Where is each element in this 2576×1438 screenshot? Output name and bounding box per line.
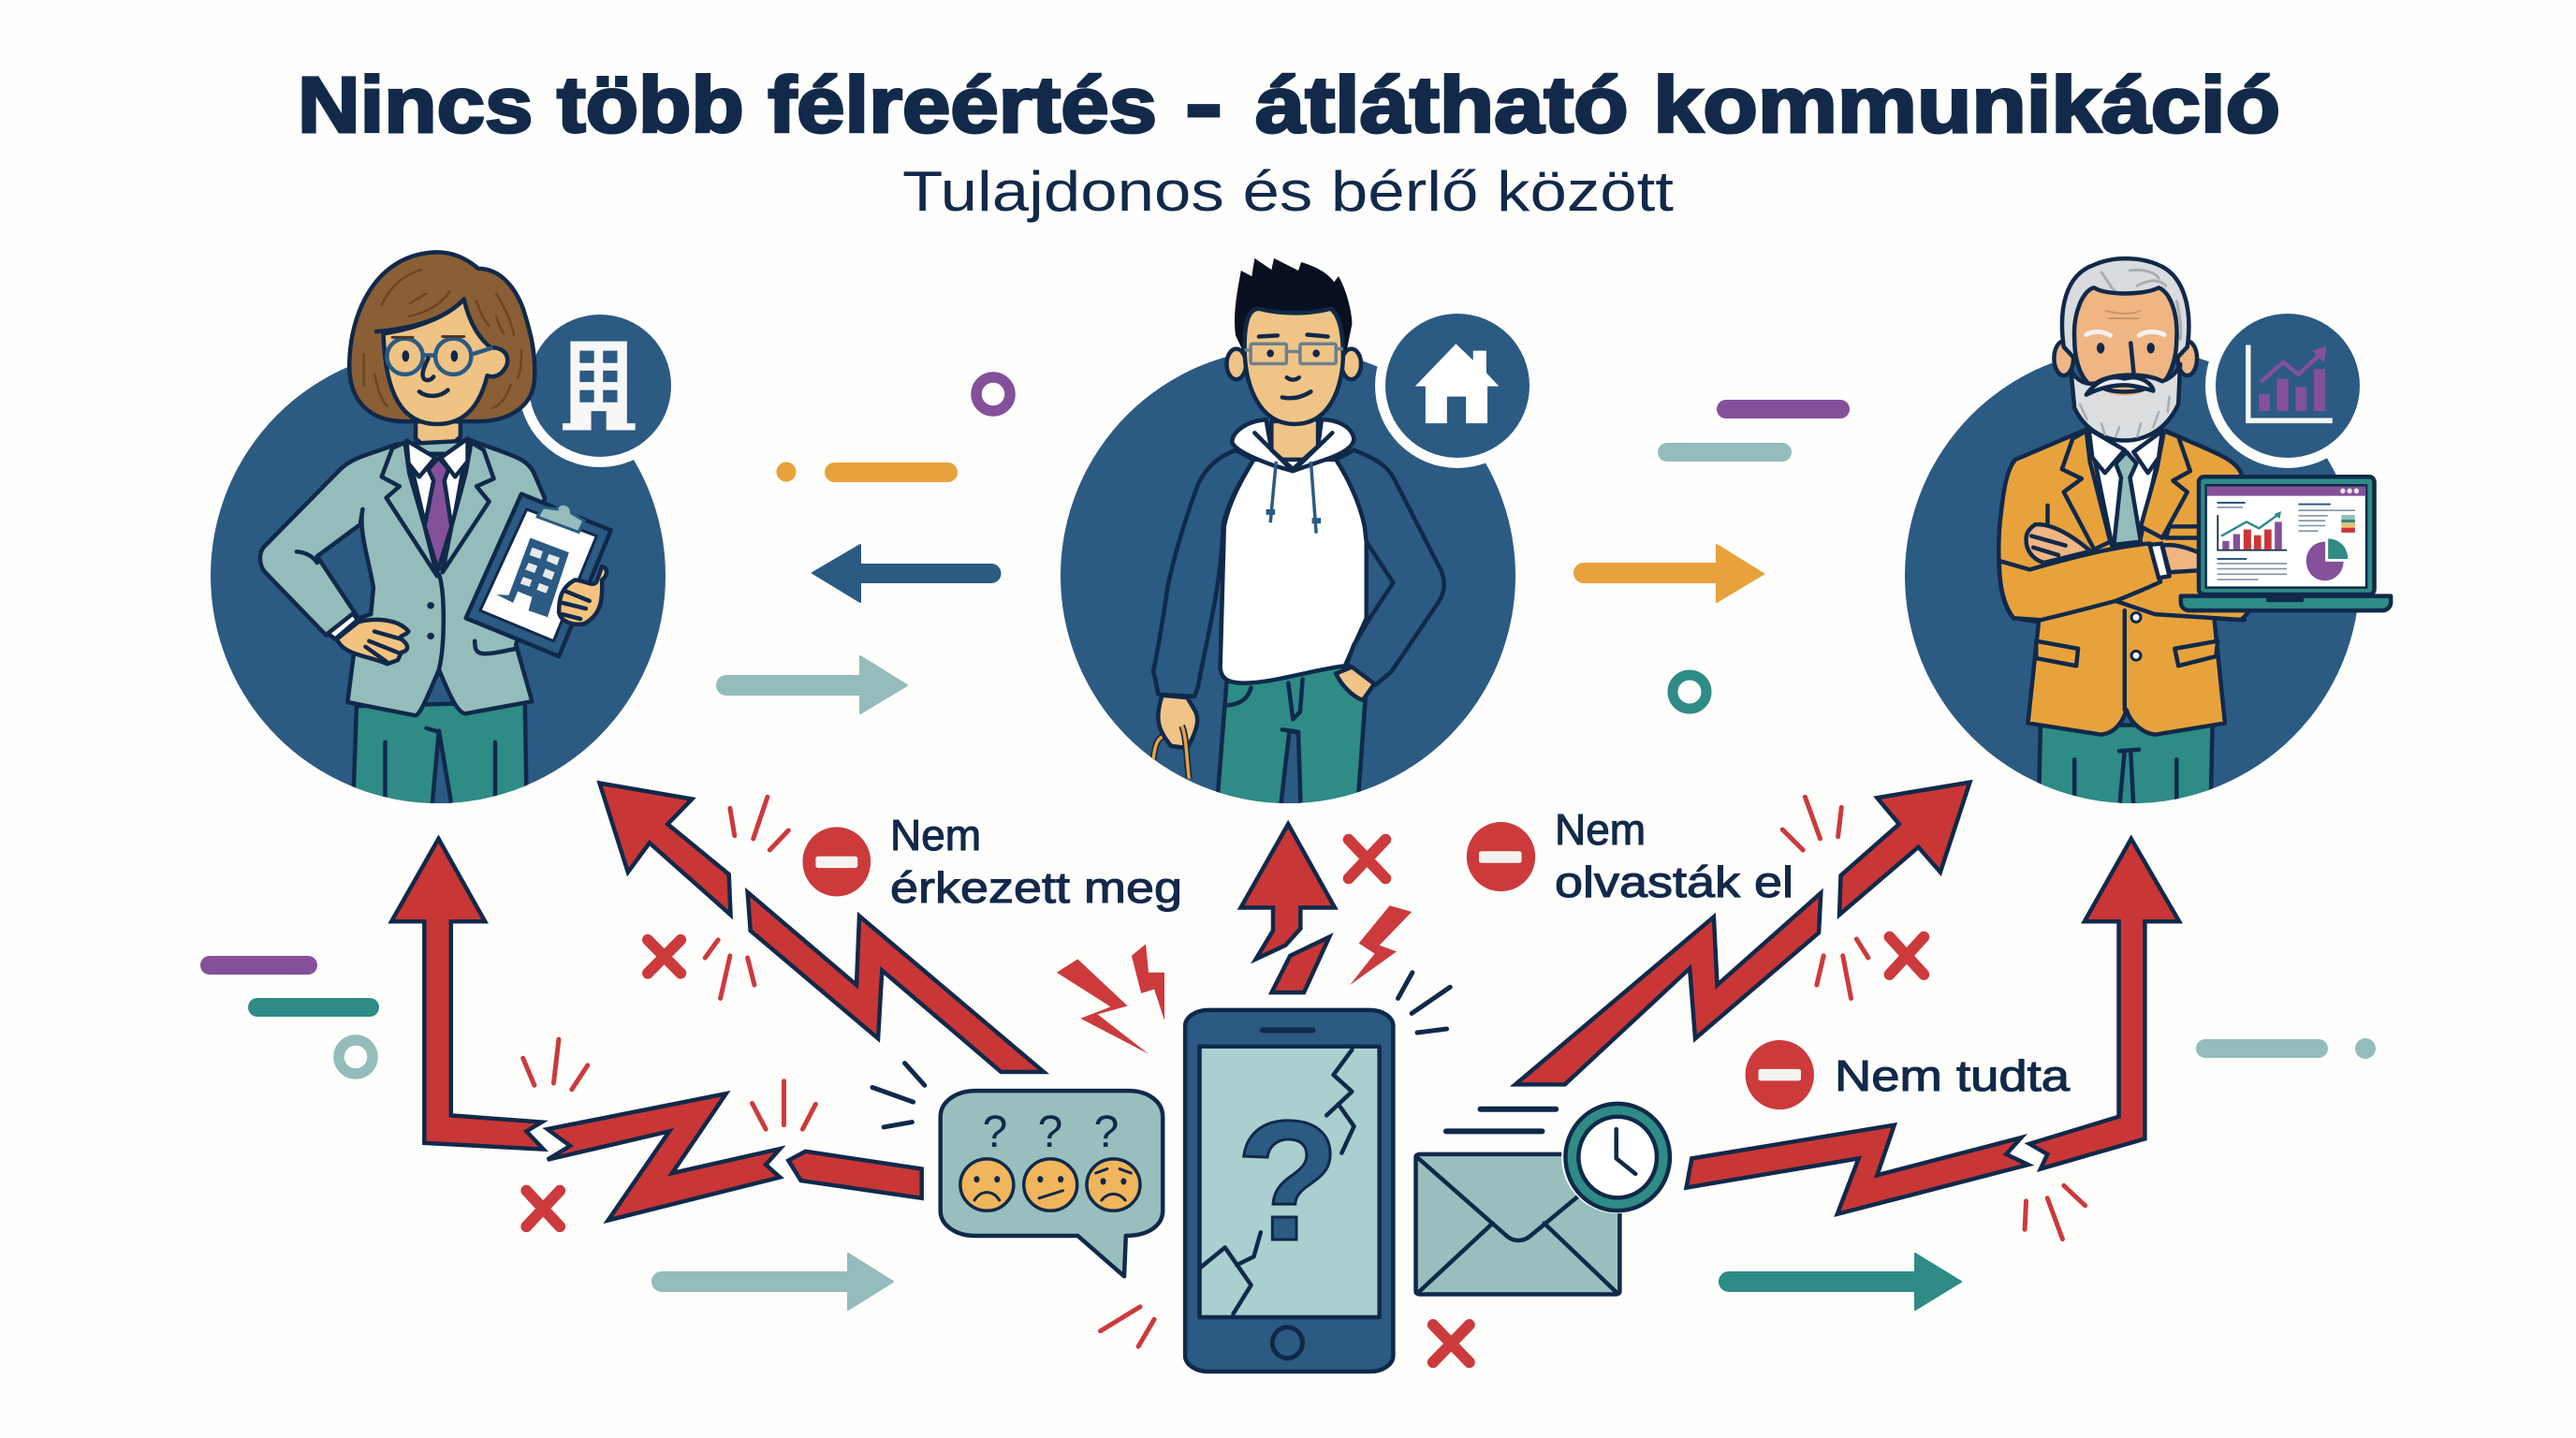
subtitle: Tulajdonos és bérlő között [902,160,1674,223]
question marks above faces: ? [1094,1108,1119,1157]
arrow: light teal bottom [652,1254,893,1310]
arrow: broken red diagonal to owner [1515,783,1969,1084]
decoration: purple bar right [1717,400,1850,418]
icon: speech bubble with confused faces [941,1091,1163,1276]
right failure paths [1185,783,2179,1372]
icon: clock [1561,1101,1674,1213]
icon: no entry [1467,822,1535,891]
icon: house badge [1375,303,1540,468]
decoration: light teal bar and dot [2196,1038,2376,1059]
spark marks right [1782,797,2086,1240]
question marks above faces: ? [1038,1108,1062,1157]
arrow: broken red diagonal to manager [600,784,1044,1072]
decoration: teal ring [1673,675,1706,709]
icon: growth chart badge [2205,303,2370,468]
figure: senior man [1998,258,2248,735]
left failure paths [391,784,1164,1346]
callout: not received [802,811,1182,912]
icon: no entry [802,827,871,896]
arrow: broken red path to tenant [1241,824,1335,992]
arrow: orange right [1574,545,1764,602]
icon: no entry [1746,1040,1814,1109]
decoration: light teal ring [339,1040,373,1074]
figure: young man [1153,258,1444,809]
arrow: broken red path to owner, far right [1687,839,2179,1214]
decoration: purple ring [976,377,1010,411]
question marks above faces [983,1108,1119,1157]
label text: Nem tudta [1835,1051,2070,1100]
icon: laptop with dashboard [2181,477,2391,610]
question marks above faces: ? [983,1108,1007,1157]
speed lines [1446,1109,1556,1131]
decoration: purple bar left [200,956,317,975]
panel: senior owner [1905,258,2391,809]
title: – [1188,61,1220,149]
label text: Nem [890,811,981,859]
spark marks left [523,797,1154,1346]
decoration: teal bar left [248,998,379,1017]
backdrop circle [1061,348,1515,803]
label text: Nem [1555,805,1646,854]
tick marks near bubble [872,1064,925,1127]
callout: not read [1467,805,1793,906]
tick marks near phone [1398,973,1450,1033]
icon: envelope [1416,1154,1619,1294]
panel: woman property manager [211,252,681,809]
label text: érkezett meg [890,863,1182,912]
icon: cracked smartphone [1185,1010,1393,1372]
arrow: light teal right, left side [717,656,907,713]
callout: did not know [1746,1040,2070,1109]
label text: olvasták el [1555,858,1793,906]
arrow: teal bottom [1720,1254,1961,1310]
figure: woman [260,252,611,809]
decoration: light teal bar right [1658,443,1792,462]
arrow: broken red path to manager, far left [391,839,922,1220]
panel: young tenant [1061,258,1540,809]
icon: lightning bolts [1057,944,1164,1054]
arrow: blue left [812,545,1000,602]
title: Nincs több félreértés [298,61,1157,149]
icon: red x marks right [1349,840,1924,1362]
icon: office building badge [519,304,681,467]
decoration: orange dot [777,462,796,481]
figure: senior man pants [2039,725,2213,809]
decoration: orange bar [825,462,958,482]
backdrop circle [211,348,666,803]
backdrop circle [1905,348,2360,803]
icon: red x marks left [526,940,681,1226]
question mark on phone: ? [1236,1085,1340,1276]
title: átlátható kommunikáció [1255,61,2280,149]
icon: lightning bolt [1350,905,1412,985]
